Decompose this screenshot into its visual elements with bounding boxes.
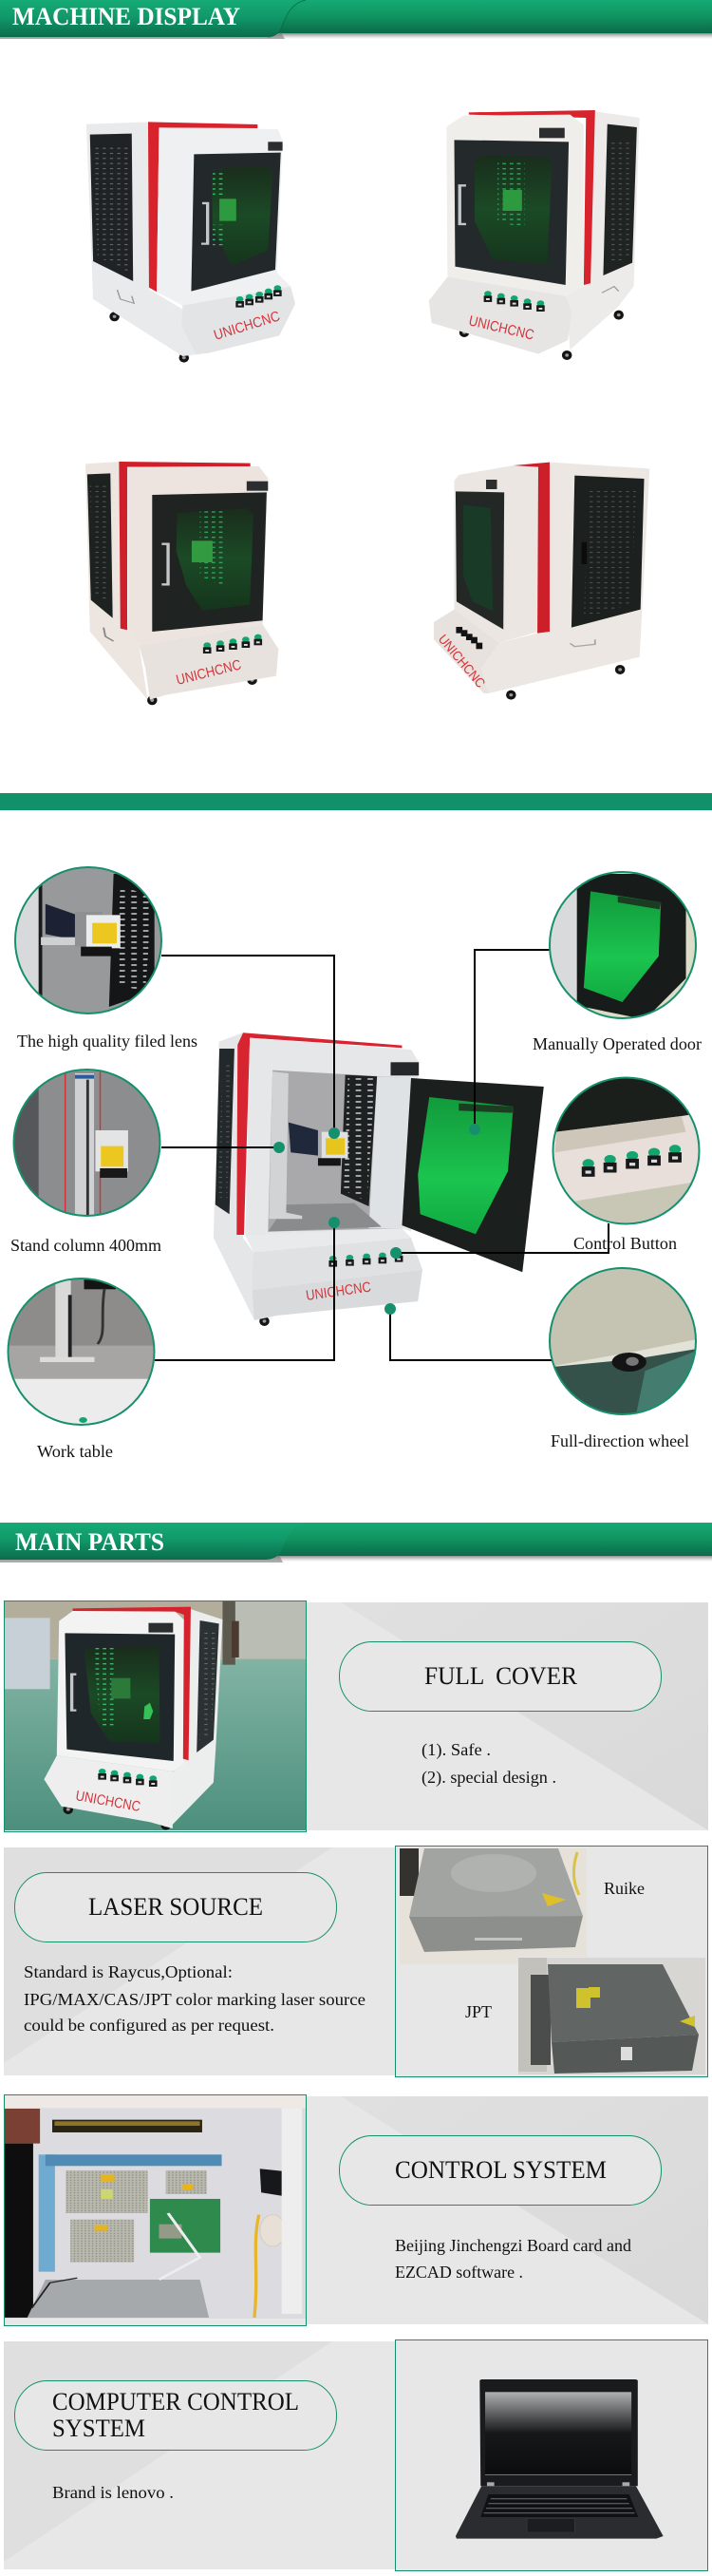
title pill: computer control system (15, 2380, 336, 2451)
label: UNICHCNC: UNICHCNC (175, 656, 243, 689)
title: computer control system: COMPUTER CONTROL (52, 2388, 299, 2415)
inset: field lens (13, 864, 163, 1016)
text: laser source description: IPG/MAX/CAS/JPT color marking laser source (24, 1990, 365, 2009)
photo: Ruike source (400, 1848, 587, 1964)
photo: machine side view (434, 463, 649, 700)
text: brand: Brand is lenovo . (52, 2483, 174, 2502)
panel: computer control system (4, 2340, 708, 2570)
caption: field lens: The high quality filed lens (17, 1032, 197, 1051)
caption: door: Manually Operated door (533, 1034, 702, 1053)
photo: machine front-left view (429, 110, 640, 360)
caption: control button: Control Button (573, 1234, 677, 1253)
icon: laptop (456, 2379, 664, 2539)
title: laser source: LASER SOURCE (88, 1893, 263, 1921)
text: laser source description: could be configured as per request. (24, 2016, 274, 2035)
title pill: control system (340, 2135, 661, 2206)
inset: work table (5, 1276, 157, 1428)
label: UNICHCNC: UNICHCNC (436, 632, 489, 691)
heading: main parts: MAIN PARTS (15, 1528, 164, 1556)
label: UNICHCNC: UNICHCNC (212, 308, 282, 344)
caption: wheel: Full-direction wheel (551, 1431, 689, 1450)
box: laser source photos (395, 1847, 708, 2076)
connector lines (155, 950, 609, 1360)
panel: control system (4, 2095, 708, 2325)
caption: JPT: JPT (465, 2002, 492, 2021)
photo: JPT source (518, 1958, 705, 2074)
photo: machine in workshop (4, 1601, 307, 1831)
label: UNICHCNC: UNICHCNC (74, 1788, 141, 1815)
title pill: laser source (15, 1873, 336, 1941)
callout dots (273, 1124, 480, 1315)
text: laser source description: Standard is Raycus,Optional: (24, 1962, 233, 1981)
caption: stand column: Stand column 400mm (10, 1236, 161, 1255)
text: full cover list: (2). special design . (422, 1768, 556, 1787)
inset: control buttons (552, 1076, 702, 1232)
inset: stand column (11, 1067, 163, 1219)
title: control system: CONTROL SYSTEM (395, 2156, 607, 2184)
panel: laser source (4, 1847, 708, 2076)
caption: Ruike: Ruike (604, 1879, 645, 1898)
divider band (0, 793, 712, 810)
inset: door (548, 871, 697, 1019)
label: UNICHCNC: UNICHCNC (467, 313, 535, 344)
banner: main parts (0, 1523, 712, 1563)
title: full cover: FULL COVER (424, 1662, 578, 1690)
text: control system description: EZCAD software . (395, 2263, 523, 2282)
inset: wheel (548, 1266, 700, 1415)
diagram: machine with open door (214, 1032, 544, 1326)
banner: machine display (0, 0, 712, 39)
text: control system description (395, 2236, 631, 2282)
heading: machine display: MACHINE DISPLAY (12, 3, 240, 30)
text: laser source description (24, 1962, 365, 2035)
photo: machine front-right view (86, 122, 295, 363)
caption: work table: Work table (37, 1442, 113, 1461)
photo: control cabinet (4, 2095, 307, 2325)
text: full cover list (422, 1740, 556, 1787)
photo: machine front view (85, 462, 278, 705)
text: control system description: Beijing Jinchengzi Board card and (395, 2236, 631, 2255)
label: UNICHCNC: UNICHCNC (305, 1279, 372, 1304)
box: laptop photo (395, 2340, 708, 2570)
text: full cover list: (1). Safe . (422, 1740, 491, 1759)
title pill: computer control system: SYSTEM (52, 2415, 145, 2442)
panel: full cover (4, 1601, 708, 1831)
title pill: full cover (340, 1641, 661, 1712)
